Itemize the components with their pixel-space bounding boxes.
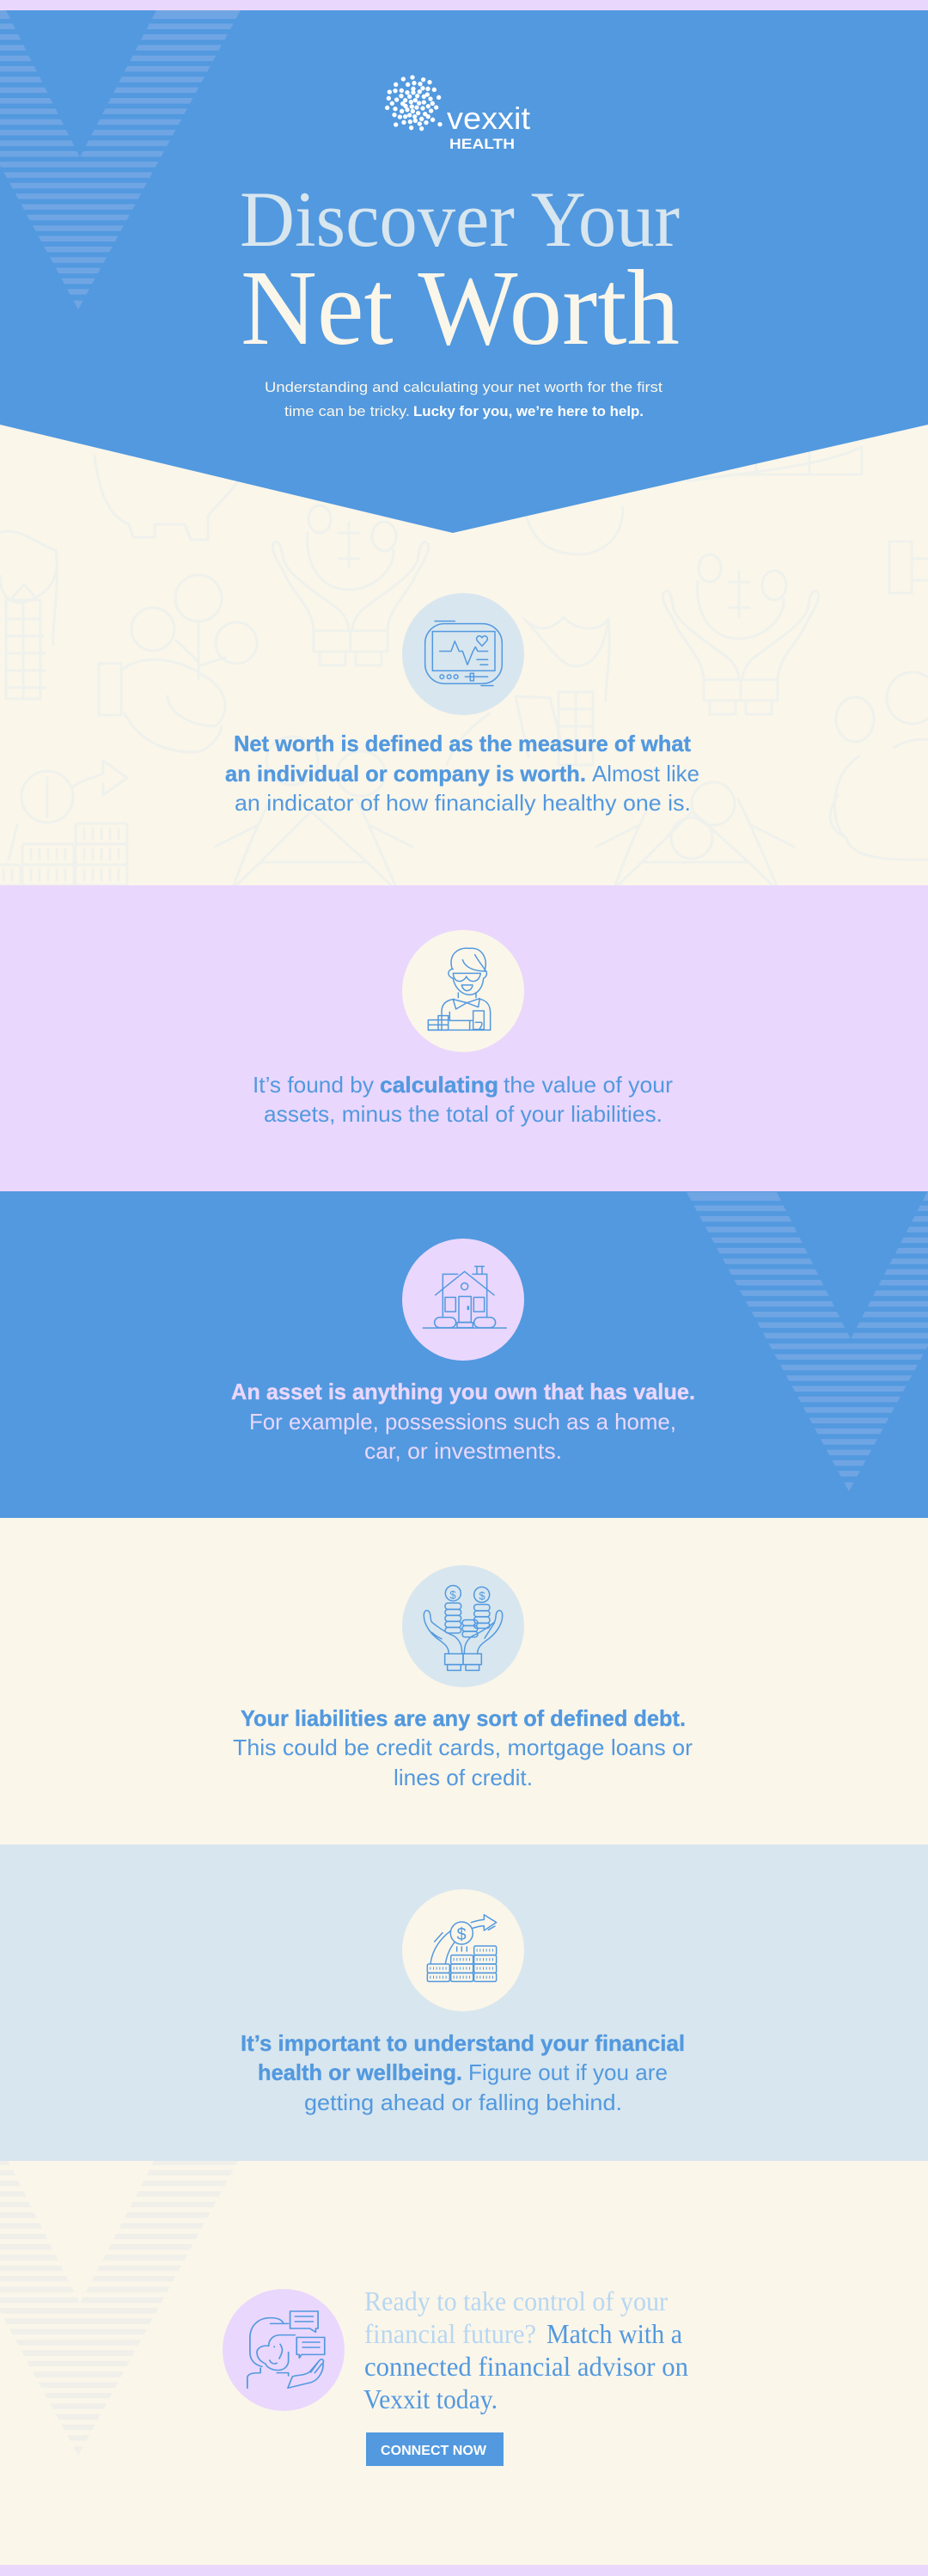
text: understanding finances: [241, 2030, 685, 2115]
text: call to action: connected financial advisor on: [364, 2351, 688, 2382]
text: call to action: financial future?: [364, 2318, 536, 2349]
icon circle: hands holding coins: $: [449, 1588, 456, 1601]
footer bar: [0, 2565, 928, 2576]
text: calculation: assets, minus the total of your liabilities.: [264, 1101, 662, 1127]
text: understanding finances: health or wellbeing.: [258, 2059, 462, 2085]
text: assets: An asset is anything you own that has value.: [231, 1379, 695, 1404]
panel: header: [0, 0, 928, 533]
text: call to action: [363, 2285, 688, 2414]
icon circle: coins and arrow: $: [456, 1925, 467, 1944]
panel: net worth definition: [0, 413, 928, 885]
text: net worth definition: [225, 731, 699, 816]
title: Discover Your: [240, 175, 680, 263]
logo: vexxit health: HEALTH: [449, 137, 515, 152]
text: calculation: calculating: [380, 1072, 498, 1098]
logo: vexxit health: [385, 75, 530, 152]
text: call to action: Match with a: [546, 2318, 682, 2349]
text: net worth definition: Net worth is defined as the measure of what: [234, 731, 691, 756]
icon circle: health monitor: [402, 593, 524, 715]
icon circle: coins and arrow: [402, 1889, 524, 2011]
text: call to action: Vexxit today.: [363, 2383, 498, 2414]
text: net worth definition: an indicator of how financially healthy one is.: [235, 790, 691, 816]
text: understanding finances: getting ahead or falling behind.: [304, 2090, 622, 2115]
subtitle: [265, 380, 662, 419]
subtitle: Understanding and calculating your net worth for the first: [265, 380, 662, 395]
title: Net Worth: [241, 249, 680, 368]
icon circle: advisor: [223, 2289, 345, 2411]
panel: why it matters: [0, 1845, 928, 2161]
decorative striped V: [0, 2157, 241, 2456]
panel: liabilities: [0, 1518, 928, 1845]
subtitle: Lucky for you, we’re here to help.: [413, 404, 644, 419]
text: understanding finances: Figure out if you are: [468, 2059, 668, 2085]
text: net worth definition: Almost like: [592, 761, 699, 786]
button: connect now: CONNECT NOW: [381, 2444, 486, 2458]
button: connect now: [366, 2432, 504, 2466]
decorative striped V: [687, 1192, 928, 1491]
text: calculation: [253, 1072, 673, 1127]
text: assets: car, or investments.: [364, 1438, 562, 1464]
icon circle: hands holding coins: [402, 1565, 524, 1687]
text: assets: [231, 1379, 695, 1464]
panel: call to action: [0, 2161, 688, 2466]
text: liabilities: Your liabilities are any sort of defined debt.: [241, 1705, 686, 1731]
text: net worth definition: an individual or company is worth.: [225, 761, 586, 786]
icon circle: house: [402, 1239, 524, 1361]
subtitle: time can be tricky.: [284, 404, 410, 419]
logo: vexxit health: vexxit: [447, 101, 530, 136]
text: assets: For example, possessions such as a home,: [249, 1409, 676, 1435]
text: call to action: Ready to take control of your: [364, 2285, 668, 2316]
text: calculation: It’s found by: [253, 1072, 374, 1098]
title: [240, 175, 680, 368]
text: understanding finances: It’s important to understand your financial: [241, 2030, 685, 2056]
text: liabilities: [233, 1705, 693, 1790]
decorative striped V: [0, 10, 241, 309]
text: calculation: the value of your: [504, 1072, 673, 1098]
panel: assets: [0, 1191, 928, 1518]
panel: how it is calculated: [0, 885, 928, 1191]
text: liabilities: lines of credit.: [394, 1765, 533, 1790]
background money icon pattern: [0, 447, 928, 885]
icon circle: accountant: [402, 930, 524, 1052]
icon circle: hands holding coins: $: [479, 1589, 485, 1602]
text: liabilities: This could be credit cards, mortgage loans or: [233, 1735, 693, 1760]
